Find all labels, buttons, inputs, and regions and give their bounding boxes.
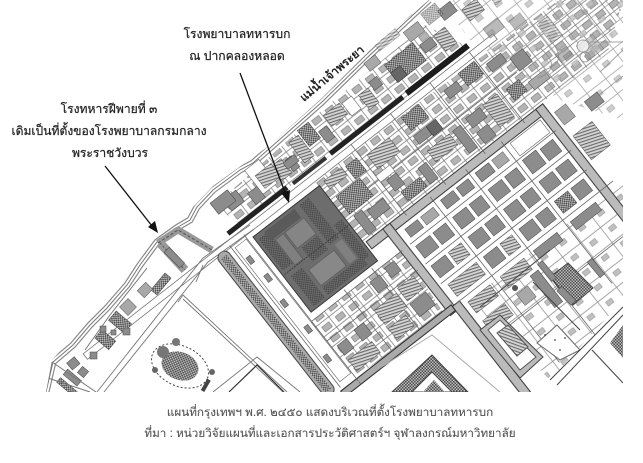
walled compound and south-east quarter bbox=[480, 250, 623, 385]
river name label: แม่น้ำเจ้าพระยา bbox=[296, 41, 367, 104]
river bank contour bbox=[46, 0, 429, 392]
arrow: to army hospital bbox=[240, 73, 290, 203]
thin streets south of hospital bbox=[229, 234, 420, 388]
heading: third oarsmen barracks: เดิมเป็นที่ตั้งของโรงพยาบาลกรมกลาง bbox=[11, 122, 207, 138]
blocks: east of canal bbox=[554, 92, 611, 160]
caption: ที่มา : หน่วยวิจัยแผนที่และเอกสารประวัติศาสตร์ฯ จุฬาลงกรณ์มหาวิทยาลัย bbox=[144, 425, 516, 440]
heading: third oarsmen barracks: โรงทหารฝีพายที่ ๓ bbox=[61, 100, 157, 116]
blocks: between river road and bank bbox=[228, 0, 485, 212]
canal: north and east walls bbox=[366, 103, 623, 250]
parallel road under black line bbox=[83, 34, 497, 359]
blocks: south of city grid bbox=[468, 202, 602, 326]
fort strip at river bbox=[158, 230, 212, 270]
palace roof shape bbox=[342, 335, 500, 392]
heading: army hospital: ณ ปากคลองหลอด bbox=[189, 49, 285, 63]
blocks: city grid inside canal bbox=[401, 120, 594, 298]
park with royal chapel trees bbox=[151, 338, 215, 392]
texture: faded north-east quarter bbox=[440, 0, 623, 120]
caption bbox=[144, 403, 516, 440]
blocks: between canal and river road bbox=[324, 48, 550, 236]
canal: west wall bbox=[383, 219, 530, 401]
hospital site block bbox=[253, 186, 378, 312]
texture: riverside built-up band bbox=[215, 25, 470, 225]
heading: third oarsmen barracks bbox=[11, 100, 207, 160]
faded north-east blocks bbox=[374, 0, 604, 63]
heading: third oarsmen barracks: พระราชวังบวร bbox=[72, 146, 149, 160]
texture: band between river road and canal bbox=[313, 0, 623, 244]
heading: army hospital bbox=[184, 27, 290, 63]
thin long streets in city grid bbox=[430, 141, 630, 362]
blocks: south of hospital bbox=[234, 238, 436, 382]
north-east garden and roundabout bbox=[538, 9, 623, 98]
texture: quarter south of hospital bbox=[311, 250, 445, 377]
thin cross streets in city grid bbox=[410, 130, 623, 325]
arrow: to barracks bbox=[105, 166, 158, 233]
heading: army hospital: โรงพยาบาลทหารบก bbox=[184, 27, 290, 41]
caption: แผนที่กรุงเทพฯ พ.ศ. ๒๔๕๐ แสดงบริเวณที่ตั้งโรงพยาบาลทหารบก bbox=[167, 403, 493, 419]
buildings along lower-left bank bbox=[46, 155, 299, 396]
canal: south road and moat strip bbox=[217, 250, 456, 392]
thin streets north of canal bbox=[339, 52, 525, 216]
roads lower left bbox=[97, 225, 300, 392]
texture: south-east quarter bbox=[470, 180, 623, 380]
road along river (black line) bbox=[226, 43, 470, 236]
